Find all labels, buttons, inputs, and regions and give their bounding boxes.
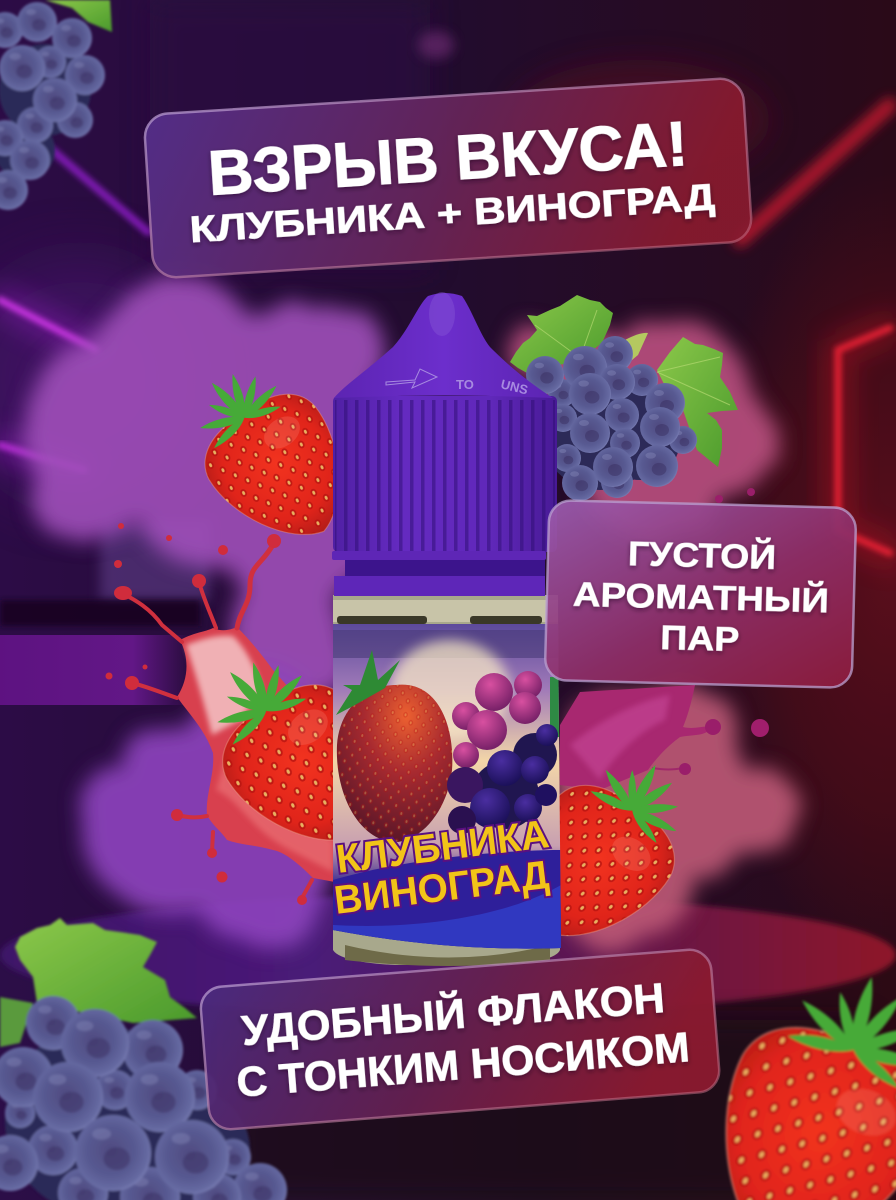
product label — [333, 624, 561, 950]
callout text: thick aromatic vapor: АРОМАТНЫЙ — [572, 575, 829, 620]
grapes: bottom-left cluster — [0, 916, 289, 1200]
panel: bottle callout — [199, 948, 721, 1131]
callout text: thick aromatic vapor: ПАР — [660, 619, 740, 659]
label grapes — [447, 671, 558, 834]
label strawberry — [336, 650, 452, 842]
heading: flavor burst: ВЗРЫВ ВКУСА! — [206, 109, 690, 209]
strawberry: bottom right, blurred — [724, 976, 896, 1200]
callout text: thick aromatic vapor: ГУСТОЙ — [628, 534, 776, 577]
strawberry: lower right — [490, 729, 718, 972]
label title: ВИНОГРАД — [332, 853, 551, 923]
grapes: top-left cluster — [0, 0, 114, 212]
grapes: cluster behind the bottle — [510, 295, 738, 501]
label title — [332, 812, 552, 923]
subheading: flavors: КЛУБНИКА + ВИНОГРАД — [189, 176, 716, 250]
panel: headline — [144, 77, 753, 279]
bottle — [332, 292, 561, 966]
cap: TO — [456, 377, 474, 392]
glass body — [333, 595, 560, 966]
juice splash: red — [106, 523, 335, 905]
label title: КЛУБНИКА — [334, 812, 552, 882]
cap — [332, 292, 557, 596]
cap: UNS — [499, 376, 530, 398]
callout text: convenient bottle with thin nozzle: УДОБНЫЙ ФЛАКОН — [240, 973, 666, 1054]
strawberry: middle left — [177, 626, 413, 878]
smoke clouds — [25, 275, 799, 950]
panel: vapor callout — [545, 500, 856, 688]
juice splash: purple — [560, 488, 769, 790]
callout text: convenient bottle with thin nozzle: С ТОНКИМ НОСИКОМ — [235, 1023, 691, 1106]
strawberry: upper left — [164, 341, 377, 568]
